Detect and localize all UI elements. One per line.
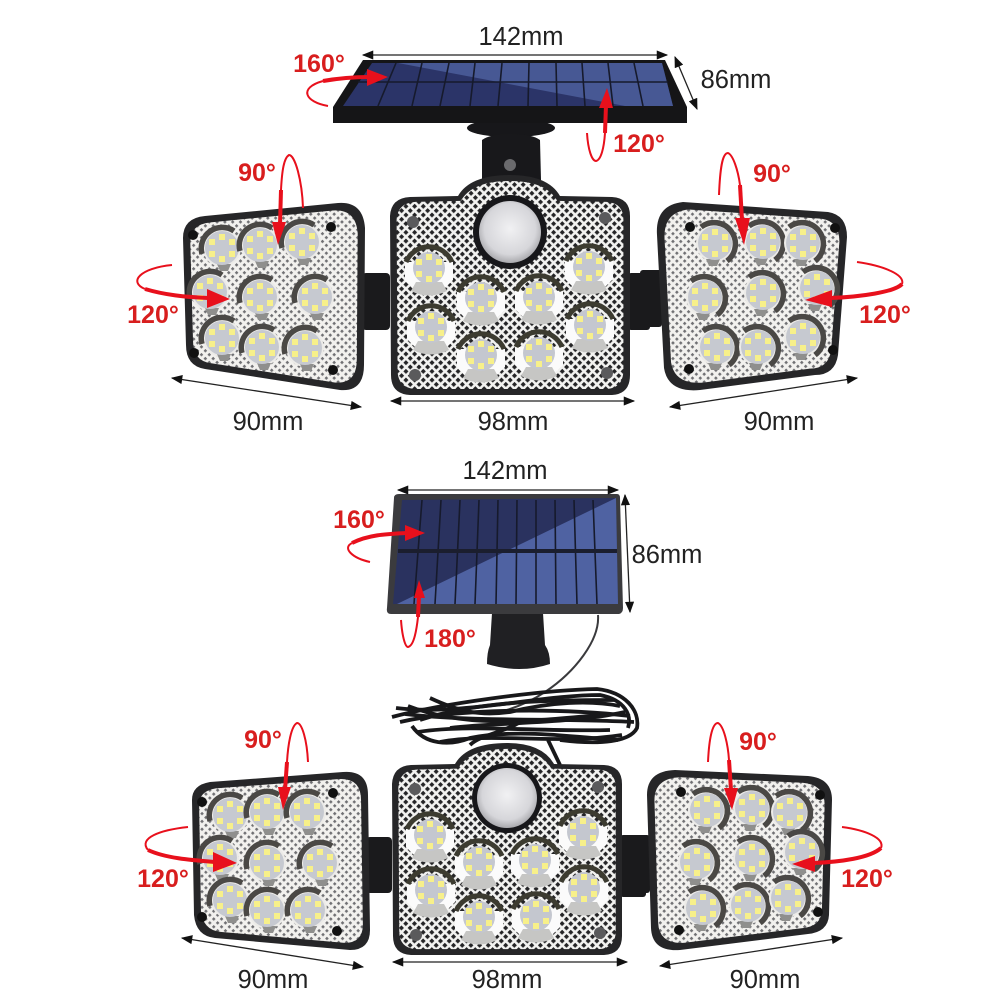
rotation: bottom right head 120 degrees [792,827,893,893]
rotation: top right head 90 degrees [719,153,791,245]
dotted plate [397,181,623,389]
rotation: bottom left head 90 degrees [244,723,308,810]
dimension: top right head width: 90mm [744,408,814,436]
LEDs [199,791,339,933]
dotted plate [190,210,358,383]
rotation: top left head 120 degrees: 120° [127,301,179,329]
rotation: top panel 120 degrees: 120° [613,130,665,158]
dimension: top right head width [670,378,857,436]
dimension: bottom left head width: 90mm [238,966,308,994]
dimension: bottom panel width: 142mm [462,457,548,485]
panel stand [487,613,550,669]
LEDs [405,246,614,382]
screws [684,222,840,374]
cell grid [414,500,597,604]
rotation: bottom left head 120 degrees: 120° [137,865,189,893]
LEDs [678,788,822,931]
arm [630,835,650,893]
housing [390,175,630,395]
housing [647,770,832,950]
top centre lamp head [390,175,650,395]
dimension: bottom panel height [625,495,702,612]
solar cells [343,63,673,106]
panel reflection [397,498,618,604]
housing [183,203,365,390]
rotation: bottom panel 160 degrees [333,506,425,562]
screws [197,788,342,936]
dimension: bottom panel height: 86mm [632,541,702,569]
dotted plate [654,777,825,943]
top right lamp head [640,202,847,390]
top left lamp head [183,203,390,390]
top solar panel [333,60,687,180]
dimension: top panel width: 142mm [478,23,564,51]
dimension: top centre head width: 98mm [478,408,548,436]
dotted plate [199,779,363,943]
dotted plate [398,749,616,949]
dimension: bottom left head width [182,938,363,994]
dimension: top left head width: 90mm [233,408,303,436]
arm [640,270,662,327]
LEDs [686,222,837,370]
rotation: bottom panel 180 degrees [401,580,476,653]
dimension: bottom centre head width: 98mm [472,966,542,994]
solar cells [393,498,618,604]
LEDs [189,221,334,371]
bottom solar panel [387,494,623,669]
rotation: bottom right head 90 degrees: 90° [739,728,777,756]
dimension: top left head width [172,378,361,436]
screws [188,222,338,375]
dimension: bottom right head width [660,938,842,994]
cell divider [398,549,617,553]
PIR sensor [472,763,542,833]
rotation: bottom right head 90 degrees [708,723,777,810]
bottom left lamp head [192,772,392,950]
screws [409,781,606,941]
arm [362,273,390,330]
rotation: top left head 90 degrees [238,155,303,245]
rotation: bottom left head 90 degrees: 90° [244,726,282,754]
cable and coil [392,615,637,765]
dotted plate [664,210,839,383]
housing [392,743,622,955]
panel frame [333,60,687,123]
rotation: top panel 160 degrees: 160° [293,50,345,78]
cell grid [358,63,668,106]
dimension: top panel depth: 86mm [701,66,771,94]
arm [620,835,646,897]
rotation: bottom panel 180 degrees: 180° [424,625,476,653]
rotation: top left head 120 degrees [127,265,230,329]
rotation: top panel 160 degrees [293,50,388,106]
rotation: top left head 90 degrees: 90° [238,159,276,187]
housing [657,202,847,390]
rotation: top panel 120 degrees [587,88,665,161]
rotation: top right head 120 degrees: 120° [859,301,911,329]
arm [366,837,392,893]
panel frame [387,494,623,614]
rotation: top right head 90 degrees: 90° [753,160,791,188]
screws [407,212,613,381]
rotation: bottom right head 120 degrees: 120° [841,865,893,893]
dimension: bottom right head width: 90mm [730,966,800,994]
rotation: bottom left head 120 degrees [137,827,237,893]
panel stand [467,119,555,180]
arms [628,273,650,330]
coil strands [392,689,637,765]
housing [192,772,370,950]
bottom centre lamp head [392,743,646,955]
panel reflection [398,63,673,106]
screws [674,787,825,935]
PIR sensor [473,195,547,269]
rotation: top right head 120 degrees [805,262,911,329]
rotation: bottom panel 160 degrees: 160° [333,506,385,534]
LEDs [406,811,608,944]
bottom right lamp head [630,770,832,950]
dimension: top panel depth [675,57,771,109]
